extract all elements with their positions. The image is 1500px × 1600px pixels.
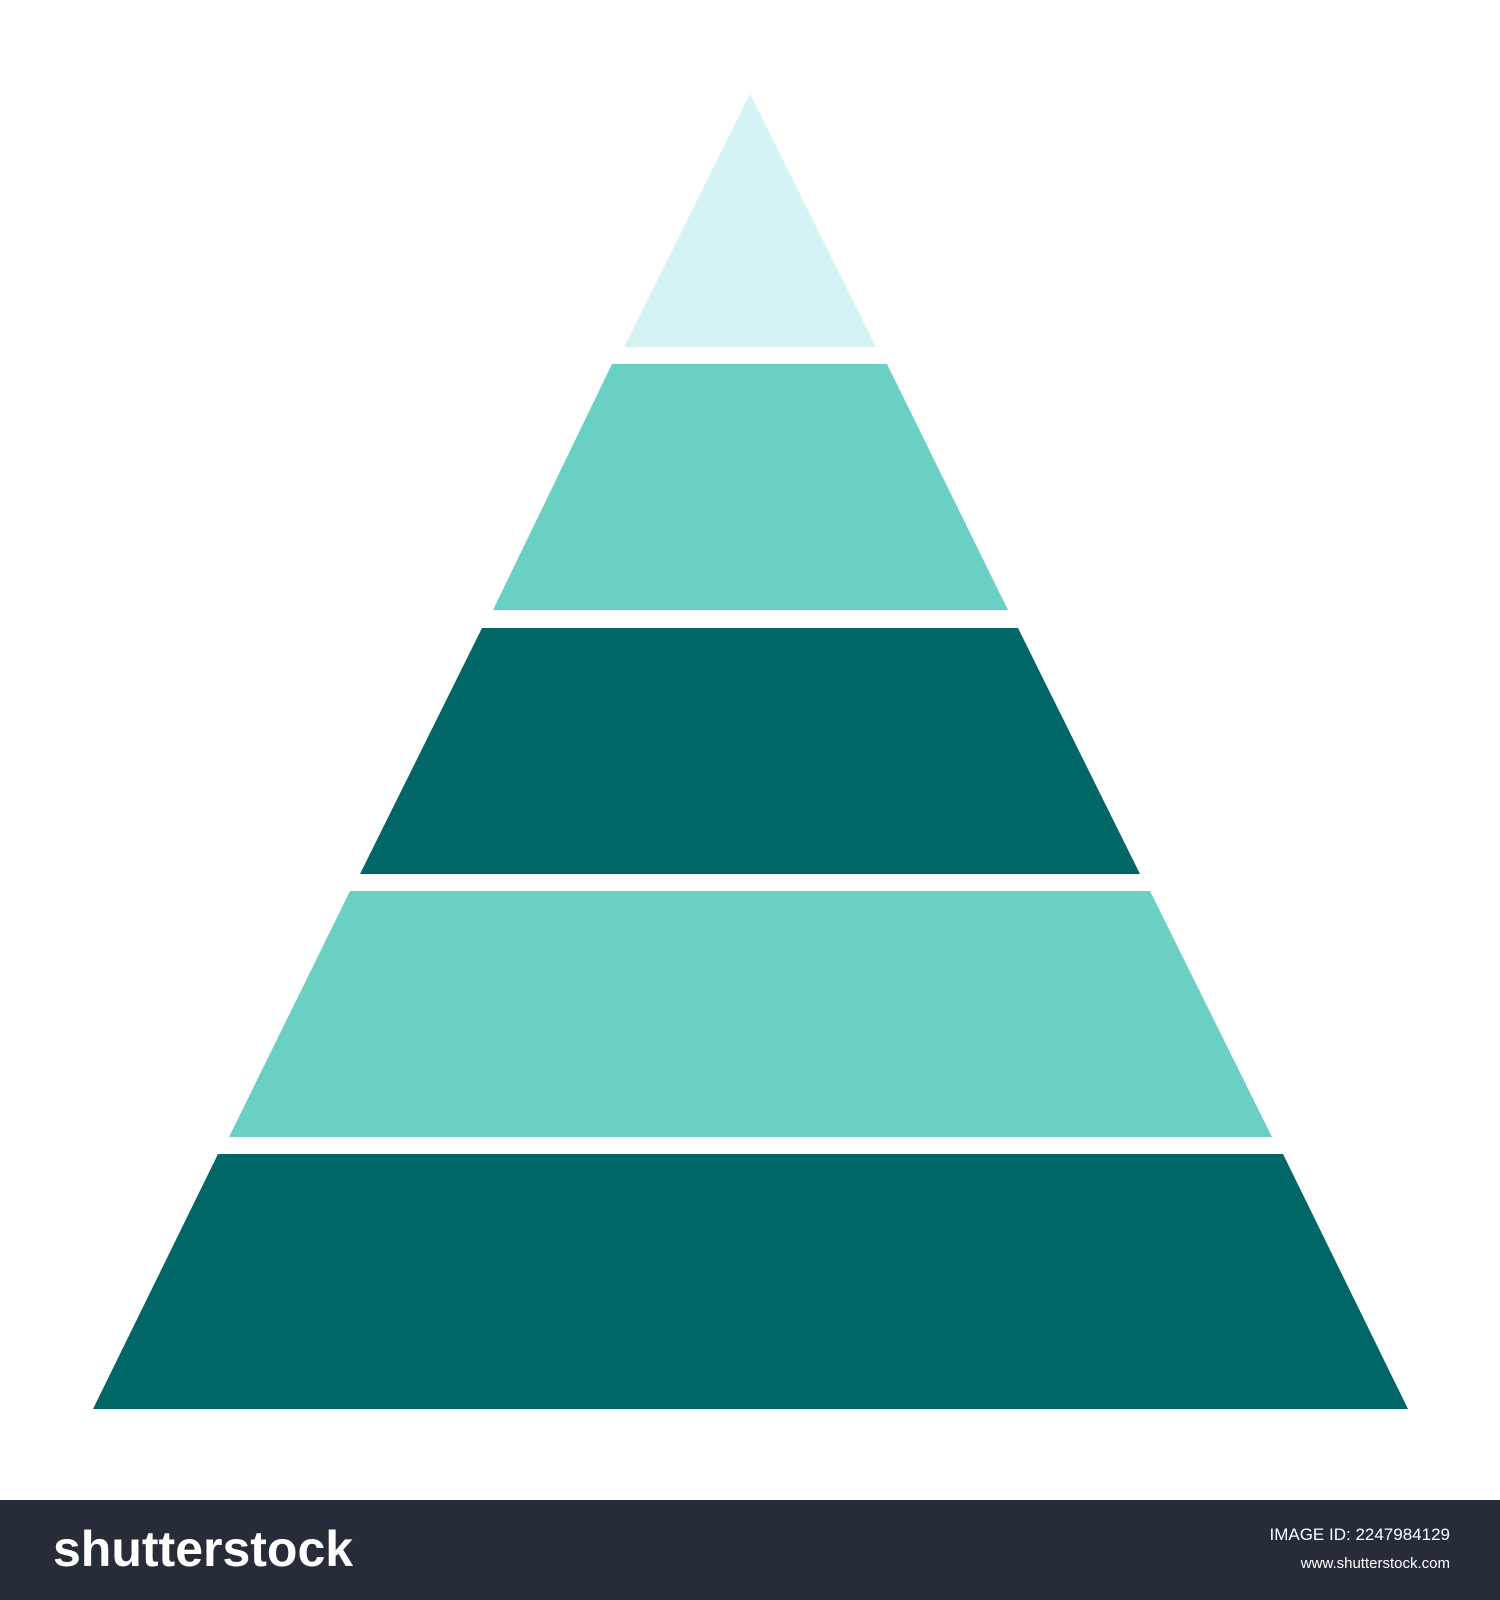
footer logo: shutterstock <box>53 1521 353 1577</box>
tier 3 <box>360 628 1140 874</box>
footer bar <box>0 1500 1500 1600</box>
tier 5: base <box>93 1154 1408 1409</box>
image id: IMAGE ID: 2247984129 <box>1269 1525 1450 1544</box>
site url: www.shutterstock.com <box>1301 1555 1450 1572</box>
tier 1: apex <box>624 94 876 347</box>
tier 4 <box>229 891 1272 1137</box>
tier 2 <box>493 364 1008 610</box>
